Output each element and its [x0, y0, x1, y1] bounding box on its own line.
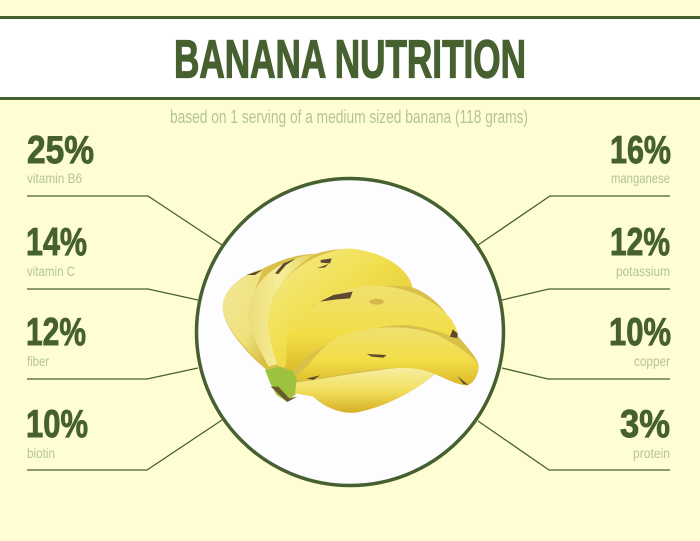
stat: potassium	[610, 221, 670, 279]
stat: copper	[609, 311, 671, 369]
title: BANANA NUTRITION	[174, 30, 526, 90]
stat: manganese: manganese	[611, 170, 670, 186]
stat: biotin: 10%	[26, 403, 88, 446]
stat: vitamin B6: 25%	[27, 129, 94, 172]
central circle	[196, 178, 504, 486]
stat: vitamin C: 14%	[26, 221, 87, 264]
stat: vitamin C: vitamin C	[27, 263, 75, 279]
stat: vitamin C	[26, 221, 87, 279]
stat: protein: 3%	[620, 403, 670, 446]
stat: fiber: 12%	[26, 311, 86, 354]
stat: vitamin B6: vitamin B6	[27, 170, 82, 186]
stat: vitamin B6	[27, 129, 94, 186]
stat: biotin	[26, 403, 88, 461]
stat: potassium: potassium	[616, 263, 670, 279]
header band	[0, 16, 700, 100]
stat: copper: 10%	[609, 311, 671, 354]
stat: protein: protein	[633, 445, 670, 461]
stat: biotin: biotin	[27, 445, 55, 461]
stat: protein	[620, 403, 670, 461]
subtitle: based on 1 serving of a medium sized banana (118 grams)	[170, 107, 528, 127]
stat: copper: copper	[634, 353, 670, 369]
stat: manganese: 16%	[610, 129, 671, 172]
stat: potassium: 12%	[610, 221, 670, 264]
stat: fiber	[26, 311, 86, 369]
stat: fiber: fiber	[27, 353, 49, 369]
icon: banana bunch	[223, 248, 479, 413]
stat: manganese	[610, 129, 671, 186]
connector lines	[27, 196, 670, 470]
